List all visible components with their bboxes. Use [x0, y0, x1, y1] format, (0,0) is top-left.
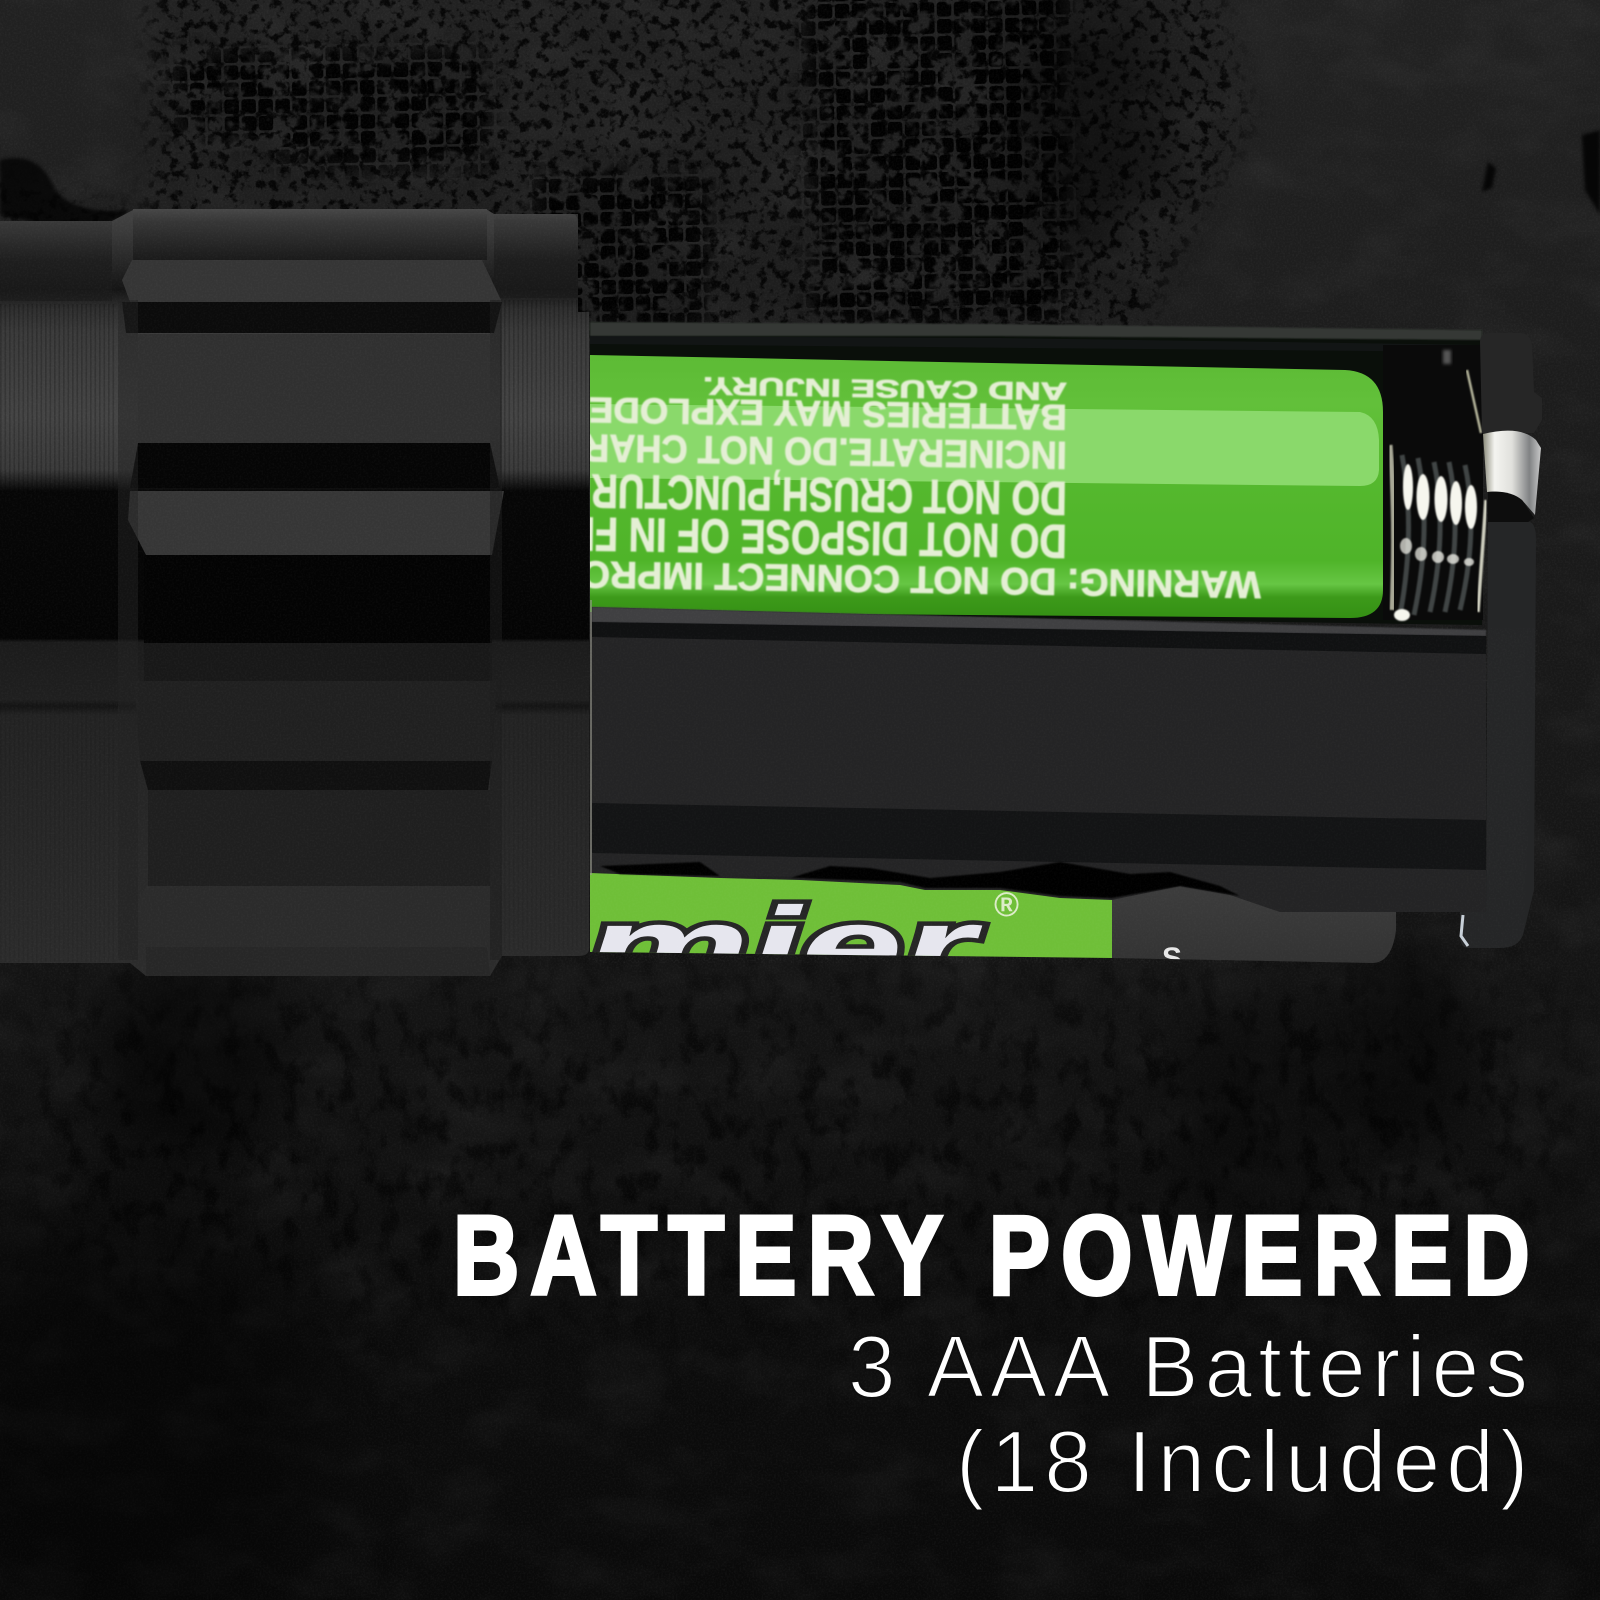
subheading: 3 AAA Batteries: 3 AAA Batteries: [848, 1319, 1528, 1416]
upside-down warning text on battery: DO NOT DISPOSE OF IN FIRE: [531, 506, 1067, 567]
flashlight body: black metal head with threads and facets: [0, 209, 589, 976]
green label: [590, 860, 1112, 958]
small metal contact at cap notch: [1461, 915, 1468, 946]
lower battery with Premier label under holder: [590, 860, 1396, 963]
battery highlight band: [590, 404, 1379, 486]
threaded left collar: [0, 221, 116, 962]
black plastic end cap upper block: [1480, 333, 1542, 433]
holder ragged lower edge: [600, 862, 1240, 898]
end cap lower block: [1460, 522, 1536, 948]
end cap tab shadow: [1488, 492, 1534, 522]
registered mark: ®: [994, 886, 1019, 924]
exposed green AAA battery: [531, 355, 1383, 618]
grey label section: [1112, 860, 1396, 963]
holder upper shadow band: [592, 622, 1486, 654]
threaded right collar: [494, 214, 588, 950]
metal body silhouette: [0, 209, 589, 976]
heading: BATTERY POWERED: BATTERY POWERED: [453, 1192, 1530, 1318]
upside-down warning text on battery: AND CAUSE INJURY.: [703, 371, 1067, 405]
battery compartment: open end of the holder: [531, 322, 1542, 625]
brand lettering cropped by frame: S: [1162, 942, 1182, 975]
central knurled ring facets: [118, 209, 504, 976]
holder main plate: [590, 607, 1486, 912]
upside-down warning text on battery: INCINERATE.DO NOT CHARGE: [531, 425, 1067, 476]
brand lettering cropped by frame: mier: [586, 884, 983, 1009]
contact spring: [1383, 345, 1486, 621]
top rail of holder: [590, 322, 1482, 340]
holder top rough rail: [592, 607, 1486, 636]
upside-down warning text on battery: DO NOT CRUSH,PUNCTURE: [566, 463, 1067, 524]
holder lower shadow band: [592, 803, 1486, 870]
brand lettering cropped by frame: [592, 899, 1180, 960]
black plastic battery holder: [590, 522, 1536, 948]
thin silver seam: [590, 600, 592, 875]
upside-down warning text on battery: BATTERIES MAY EXPLODE: [589, 389, 1067, 438]
silver battery contact tab: [1483, 431, 1541, 515]
upside-down warning text on battery: [590, 376, 1262, 600]
upside-down warning text on battery: WARNING: DO NOT CONNECT IMPRO: [581, 552, 1261, 605]
compartment back void: [590, 322, 1482, 625]
subheading: 18 Included: (18 Included): [956, 1414, 1528, 1511]
